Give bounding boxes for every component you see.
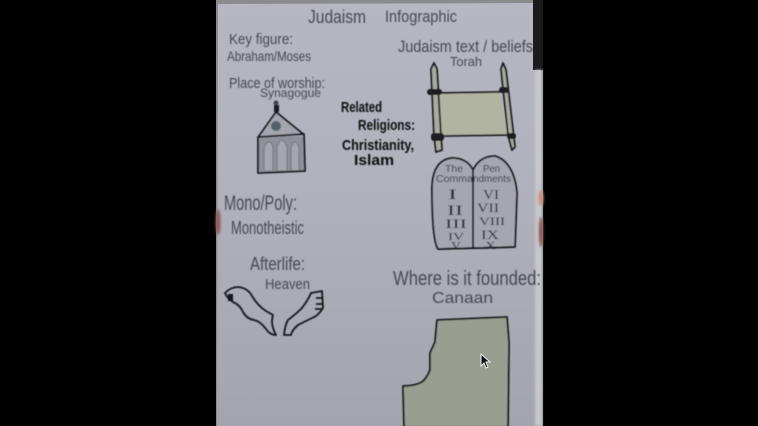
right paper edge highlight: [535, 70, 542, 426]
icon: mouse cursor: [481, 354, 490, 368]
text block: mono/poly: Mono/Poly:: [224, 192, 297, 215]
icon: ten commandments tablets: The: [445, 164, 463, 175]
icon: angel wings: [225, 287, 323, 335]
icon: ten commandments tablets: X: [485, 241, 497, 252]
text block: afterlife: Afterlife:: [250, 254, 305, 274]
icon: ten commandments tablets: Comma: [436, 174, 473, 185]
icon: ten commandments tablets: [432, 156, 517, 252]
text block: related religions: Christianity,: [342, 137, 414, 154]
text block: related religions: Related: [341, 99, 382, 116]
heading: Judaism text / beliefs: Judaism text / beliefs: [398, 37, 533, 56]
heading: where is it founded: Where is it founded:: [393, 268, 541, 290]
text block: afterlife: [250, 254, 310, 293]
icon: ten commandments tablets: VII: [477, 200, 499, 215]
title: [308, 7, 457, 27]
photo backdrop strip: [216, 0, 543, 426]
text block: place of worship: [229, 75, 325, 100]
text block: place of worship: Synagogue: [260, 86, 321, 100]
fingers holding paper: [216, 190, 544, 247]
icon: ten commandments tablets: II: [447, 203, 463, 219]
text block: place of worship: Place of worship:: [229, 75, 325, 92]
icon: torah scroll: [427, 63, 516, 152]
text block: afterlife: Heaven: [265, 276, 310, 293]
text block: mono/poly: Monotheistic: [231, 218, 304, 238]
icon: ten commandments tablets: VIII: [479, 214, 505, 228]
text block: related religions: [341, 99, 415, 169]
text block: key figure: [227, 31, 311, 64]
icon: ten commandments tablets: Pen: [483, 164, 500, 175]
text block: key figure: Abraham/Moses: [227, 48, 311, 64]
icon: ten commandments tablets: ndments: [473, 174, 511, 185]
icon: ten commandments tablets: IX: [481, 227, 500, 242]
text block: related religions: Religions:: [358, 117, 415, 134]
icon: ten commandments tablets: I: [448, 187, 457, 203]
map: Canaan: [403, 317, 509, 426]
icon: ten commandments tablets: IV: [448, 231, 464, 243]
label: Canaan: Canaan: [432, 290, 493, 307]
paper sheet: [217, 3, 542, 426]
icon: ten commandments tablets: III: [445, 216, 467, 231]
text block: key figure: Key figure:: [229, 31, 293, 48]
icon: ten commandments tablets: V: [451, 241, 462, 252]
icon: ten commandments tablets: VI: [483, 188, 499, 203]
text block: mono/poly: [224, 192, 304, 238]
title: Judaism: [308, 7, 366, 27]
text block: related religions: Islam: [354, 152, 394, 169]
title: Infographic: [385, 7, 457, 26]
icon: synagogue: [258, 100, 305, 173]
label: Torah: Torah: [450, 54, 482, 69]
